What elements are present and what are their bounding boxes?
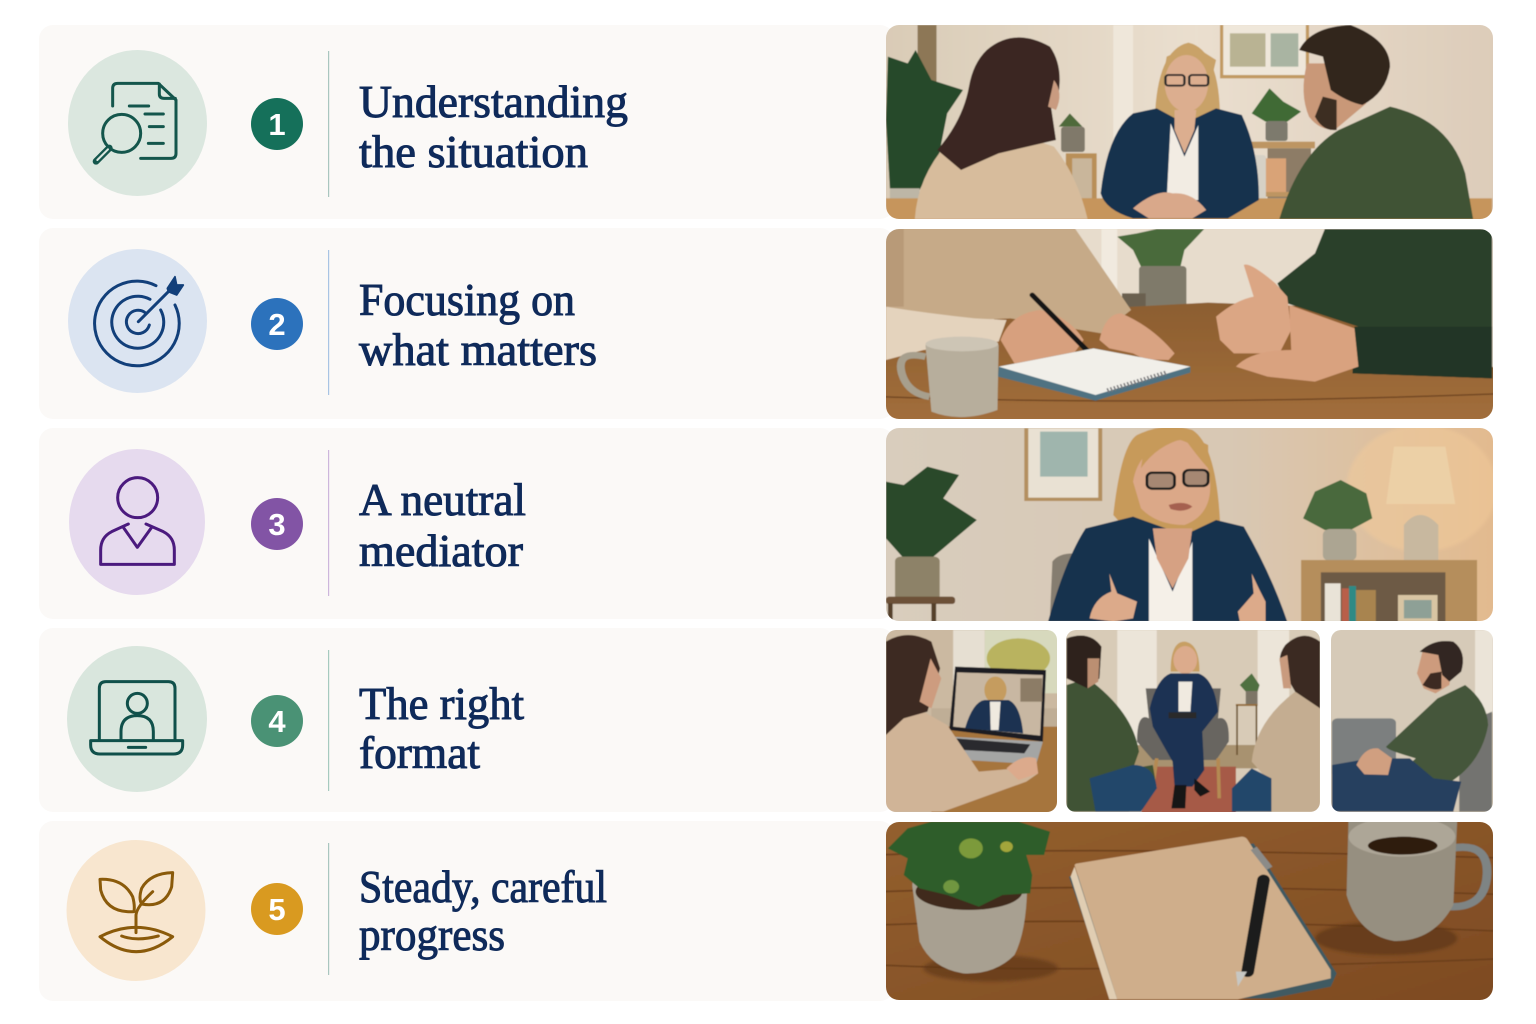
badge 3: 3 <box>268 507 286 542</box>
left hand <box>1099 313 1175 360</box>
writing hand <box>1001 310 1084 365</box>
shelf <box>1301 560 1477 623</box>
panel background 3 <box>39 428 894 619</box>
notebook <box>998 348 1190 401</box>
badge 1 <box>251 98 303 150</box>
icon: document with magnifier <box>96 83 176 161</box>
icon disc 5 <box>66 840 206 981</box>
right plant <box>1303 480 1372 530</box>
icon: target with arrow <box>95 277 183 366</box>
heading 1: the situation <box>359 126 588 177</box>
lamp <box>1386 447 1455 504</box>
badge 4: 4 <box>268 704 286 739</box>
hands <box>1090 573 1137 622</box>
heading 2: Focusing on <box>359 274 575 325</box>
heading 5 <box>359 861 607 960</box>
panel background 4 <box>39 628 894 812</box>
badge 5 <box>251 883 303 935</box>
panel background 5 <box>39 821 894 1001</box>
chair <box>1050 553 1074 618</box>
row 5: steady, careful progress <box>39 815 1513 1005</box>
man seen from the side <box>1279 107 1473 219</box>
mug <box>1449 847 1487 907</box>
heading 4 <box>359 678 524 778</box>
icon disc 4 <box>67 646 207 792</box>
mediator <box>1171 642 1199 672</box>
left plant <box>886 467 977 558</box>
badge 2 <box>251 298 303 350</box>
heading 1: Understanding <box>359 76 628 127</box>
mug <box>901 355 929 397</box>
badge 1: 1 <box>268 107 286 142</box>
woman seen from behind <box>915 133 1088 219</box>
pen <box>1032 295 1092 355</box>
divider 5 <box>328 843 329 975</box>
photo 4c: man seated on a sofa <box>1329 625 1495 818</box>
heading 1 <box>359 76 628 177</box>
notebook <box>1069 843 1337 998</box>
man sleeves and hands <box>1277 229 1492 378</box>
icon disc 3 <box>69 449 205 595</box>
photo 5: plant, notebook, pen and mug on table <box>886 822 1493 1000</box>
heading 3: mediator <box>359 525 523 576</box>
heading 5: progress <box>359 909 505 960</box>
icon: laptop with person <box>91 682 183 754</box>
row 2: focusing on what matters <box>39 227 1513 427</box>
heading 2: what matters <box>359 324 597 375</box>
heading 3: A neutral <box>359 474 526 525</box>
heading 2 <box>359 274 597 375</box>
photo 1: mediator between two clients <box>880 20 1513 227</box>
row 3: a neutral mediator <box>39 425 1513 625</box>
badge 2: 2 <box>268 307 286 342</box>
row 4: the right format <box>39 625 1495 818</box>
photo 2: hands over a notebook at a table <box>880 227 1513 427</box>
photo 4b: in-person session with mediator <box>1064 625 1325 818</box>
badge 3 <box>251 498 303 550</box>
plant <box>888 822 1050 907</box>
woman <box>1252 692 1320 812</box>
pen <box>1248 880 1264 972</box>
icon disc 1 <box>68 50 207 196</box>
heading 5: Steady, careful <box>359 861 607 912</box>
panel background 1 <box>39 25 894 219</box>
pot <box>912 872 1027 973</box>
man <box>1067 678 1157 812</box>
photo 4a: online session on laptop <box>886 630 1057 812</box>
badge 4 <box>251 695 303 747</box>
icon: person <box>101 478 174 564</box>
badge 5: 5 <box>268 892 286 927</box>
photo 3: mediator speaking <box>880 425 1513 625</box>
mediator <box>1155 43 1220 123</box>
woman <box>1113 427 1220 542</box>
heading 4: The right <box>359 678 524 729</box>
divider 3 <box>328 450 329 596</box>
woman sleeves <box>880 227 1131 360</box>
icon disc 2 <box>68 249 207 393</box>
divider 4 <box>328 650 329 791</box>
panel background 2 <box>39 228 894 419</box>
divider 2 <box>328 250 329 395</box>
heading 4: format <box>359 727 480 778</box>
row 1: understanding the situation <box>39 20 1513 227</box>
icon: seedling <box>100 873 173 952</box>
heading 3 <box>359 474 526 576</box>
armchair <box>1137 688 1229 760</box>
divider 1 <box>328 51 329 197</box>
